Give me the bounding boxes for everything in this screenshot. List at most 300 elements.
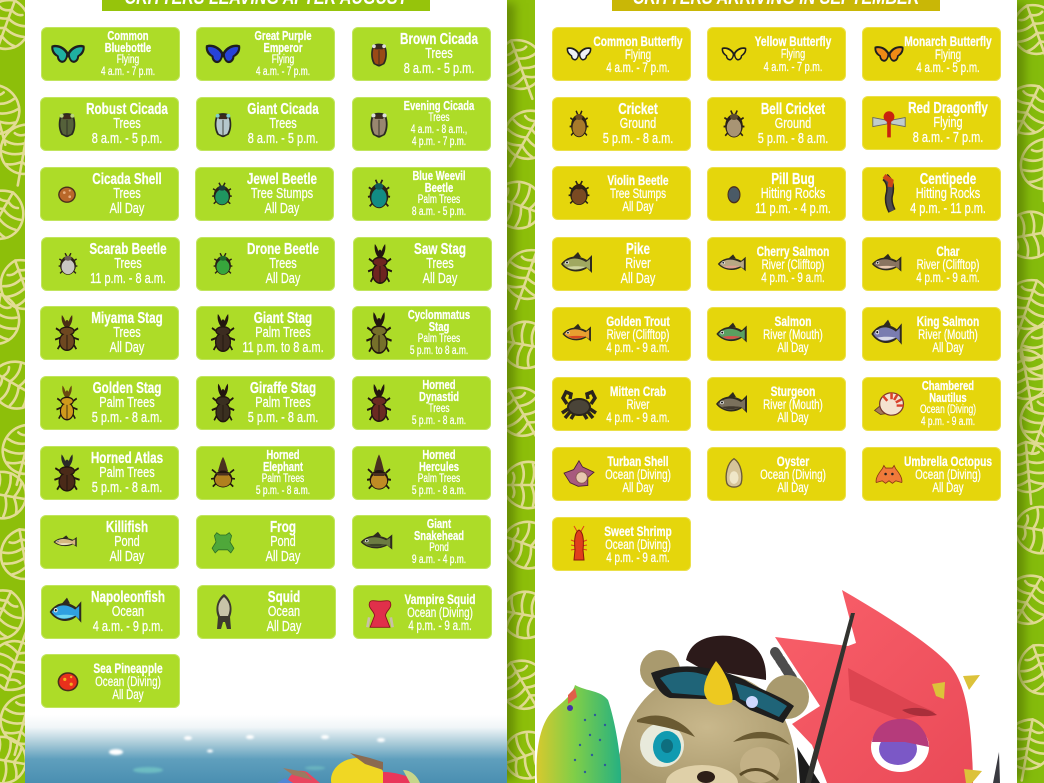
icon: Bell Cricket [718, 106, 750, 142]
text: Mitten Crab: 4 p.m. - 9 a.m. [606, 410, 669, 424]
text: King Salmon: All Day [932, 340, 963, 354]
text: Common Bluebottle: Flying [117, 54, 139, 66]
text: Golden Stag: 5 p.m. - 8 a.m. [92, 409, 162, 426]
icon: Robust Cicada [58, 113, 76, 138]
text: Common Bluebottle: Bluebottle [105, 40, 151, 55]
card: Drone Beetle [196, 237, 334, 291]
text: Monarch Butterfly: Monarch Butterfly [904, 32, 991, 48]
text: Bell Cricket [738, 103, 847, 146]
text: Horned Atlas [91, 450, 163, 496]
icon: Sturgeon [714, 384, 754, 424]
card: Cherry Salmon [707, 237, 846, 291]
text: Mitten Crab: River [626, 396, 649, 412]
text: Chambered Nautilus: 4 p.m. - 9 a.m. [920, 416, 975, 428]
text: Sea Pineapple: Sea Pineapple [93, 660, 163, 676]
text: Horned Hercules: Horned [422, 447, 456, 462]
text: Horned Dynastid [412, 377, 466, 427]
text: Common Butterfly: Flying [624, 46, 651, 62]
text: Pike: Pike [625, 241, 650, 258]
card: Golden Trout [552, 307, 690, 361]
text: Cherry Salmon [738, 244, 847, 284]
text: Golden Stag [92, 380, 162, 426]
card: Chambered Nautilus [862, 377, 1000, 431]
text: Squid [229, 591, 339, 634]
text: Yellow Butterfly: Flying [780, 46, 805, 60]
text: Jewel Beetle: Tree Stumps [251, 185, 313, 202]
icon: Brown Cicada [371, 44, 387, 66]
text: Killifish [72, 521, 182, 564]
card: Horned Atlas [40, 446, 178, 500]
text: Brown Cicada: Brown Cicada [400, 31, 478, 48]
icon: Sweet Shrimp [559, 524, 599, 564]
icon: Cicada Shell [58, 186, 76, 203]
text: Evening Cicada: Trees [428, 112, 450, 124]
card: Mitten Crab [552, 377, 690, 431]
card: Monarch Butterfly [862, 27, 1000, 81]
red alligator villager [775, 590, 1000, 783]
card: Napoleonfish [41, 585, 180, 639]
text: Giant Stag [242, 310, 324, 356]
card: Common Butterfly [552, 27, 690, 81]
card: Cicada Shell [40, 167, 178, 221]
text: Horned Elephant: Palm Trees [262, 473, 304, 485]
text: Frog: Pond [270, 533, 296, 550]
panel: critters leaving [25, 0, 507, 783]
text: Sturgeon: All Day [777, 410, 808, 424]
icon: Frog [207, 526, 239, 558]
text: Giant Snakehead: Pond [429, 542, 449, 554]
text: Giraffe Stag: Palm Trees [255, 394, 311, 411]
text: Robust Cicada [86, 101, 168, 147]
text: Golden Trout: River (Clifftop) [606, 326, 669, 342]
card: Char [862, 237, 1000, 291]
icon: Violin Beetle [563, 177, 595, 209]
icon: Red Dragonfly [871, 105, 907, 141]
text: Great Purple Emperor: Emperor [263, 40, 303, 55]
icon: Golden Trout [561, 317, 597, 351]
text: Horned Elephant [228, 449, 338, 497]
card: Giant Stag [196, 306, 334, 360]
card: Cricket [552, 97, 690, 151]
text: Giant Snakehead [384, 518, 494, 566]
text: Horned Dynastid: Dynastid [419, 389, 459, 404]
card: Giant Snakehead [352, 515, 490, 569]
text: Oyster: Ocean (Diving) [760, 466, 825, 482]
text: Evening Cicada [404, 98, 474, 148]
card grid: arriving [535, 0, 1017, 575]
text: Oyster: All Day [777, 480, 808, 494]
text: Cyclommatus Stag: Cyclommatus [408, 307, 470, 322]
card: Golden Stag [40, 376, 178, 430]
card: Horned Hercules [352, 446, 490, 500]
text: Scarab Beetle: 11 p.m. - 8 a.m. [90, 270, 166, 287]
text: Drone Beetle: All Day [266, 270, 300, 287]
text: Giraffe Stag: Giraffe Stag [250, 380, 316, 397]
text: Napoleonfish: 4 a.m. - 9 p.m. [93, 618, 163, 635]
text: Pill Bug: 11 p.m. - 4 p.m. [755, 200, 830, 217]
text: Red Dragonfly: Flying [933, 114, 962, 131]
text: Giant Cicada: 8 a.m. - 5 p.m. [248, 130, 318, 147]
icon: Mitten Crab [559, 384, 599, 424]
text: Great Purple Emperor: 4 a.m. - 7 p.m. [256, 66, 310, 78]
icon: Giraffe Stag [212, 384, 234, 422]
icon: Vampire Squid [362, 594, 398, 630]
fishing rod [805, 613, 855, 783]
text: Giant Snakehead: 9 a.m. - 4 p.m. [412, 554, 466, 566]
text: Giant Stag: Palm Trees [255, 324, 311, 341]
text: Miyama Stag: All Day [110, 339, 144, 356]
text: Turban Shell: Ocean (Diving) [605, 466, 670, 482]
text: Horned Hercules: Palm Trees [418, 473, 460, 485]
text: Sturgeon: Sturgeon [770, 382, 815, 398]
text: Drone Beetle: Drone Beetle [247, 241, 319, 258]
text: Horned Elephant: Horned [266, 447, 300, 462]
text: Violin Beetle [583, 174, 692, 212]
icon: Pill Bug [724, 180, 744, 208]
text: Killifish: All Day [110, 548, 144, 565]
icon: Char [870, 247, 908, 281]
text: Giant Stag: 11 p.m. to 8 a.m. [242, 339, 324, 356]
text: Oyster [738, 454, 847, 494]
card: Giant Cicada [196, 97, 334, 151]
card: Horned Dynastid [352, 376, 490, 430]
text: Blue Weevil Beetle: Blue Weevil [412, 168, 466, 183]
text: Horned Atlas: 5 p.m. - 8 a.m. [92, 479, 162, 496]
icon: Yellow Butterfly [720, 40, 748, 68]
text: Giant Snakehead: Giant [427, 516, 451, 531]
text: Sturgeon: River (Mouth) [763, 396, 822, 412]
card: Frog [196, 515, 334, 569]
text: Miyama Stag: Trees [113, 324, 141, 341]
panel: critters arriving [535, 0, 1017, 783]
text: Vampire Squid: Ocean (Diving) [407, 604, 473, 620]
text: Chambered Nautilus: Ocean (Diving) [919, 404, 975, 416]
text: Sturgeon [738, 384, 847, 424]
text: Jewel Beetle: All Day [265, 200, 299, 217]
text: Sweet Shrimp [583, 524, 692, 564]
rod reel [775, 652, 792, 678]
text: Golden Trout: 4 p.m. - 9 a.m. [606, 340, 669, 354]
text: Brown Cicada: 8 a.m. - 5 p.m. [404, 60, 474, 77]
text: Robust Cicada: 8 a.m. - 5 p.m. [92, 130, 162, 147]
text: Drone Beetle [247, 241, 319, 287]
text: Robust Cicada: Robust Cicada [86, 101, 168, 118]
card: Killifish [40, 515, 178, 569]
icon: Blue Weevil Beetle [368, 179, 390, 208]
icon: Common Butterfly [565, 40, 593, 68]
text: Cricket: Cricket [618, 101, 657, 118]
card: Great Purple Emperor [196, 27, 334, 81]
icon: Cricket [565, 106, 593, 142]
card: Salmon [707, 307, 846, 361]
text: Saw Stag: Saw Stag [414, 241, 466, 258]
card: Turban Shell [552, 447, 690, 501]
card: Sea Pineapple [41, 654, 180, 708]
text: Cyclommatus Stag: 5 p.m. to 8 a.m. [410, 345, 468, 357]
icon: Salmon [714, 315, 754, 353]
icon: Centipede [869, 174, 909, 214]
text: Jewel Beetle [246, 171, 317, 217]
text: Sea Pineapple: Ocean (Diving) [95, 674, 161, 688]
text: Horned Hercules: Hercules [419, 459, 459, 474]
icon: Giant Stag [210, 314, 236, 352]
sea illustration [25, 722, 507, 783]
icon: Horned Hercules [362, 453, 396, 493]
text: Centipede: 4 p.m. - 11 p.m. [910, 200, 985, 217]
card grid: leaving [40, 27, 492, 708]
text: Mitten Crab [583, 384, 692, 424]
text: Sea Pineapple [73, 662, 183, 700]
text: Cherry Salmon: River (Clifftop) [761, 256, 824, 272]
icon: Common Bluebottle [51, 44, 85, 63]
text: Turban Shell: All Day [622, 480, 653, 494]
icon: Horned Atlas [54, 454, 80, 492]
text: Horned Dynastid: 5 p.m. - 8 a.m. [412, 415, 466, 427]
text: Drone Beetle: Trees [269, 255, 297, 272]
text: Umbrella Octopus [893, 454, 1002, 494]
text: Golden Trout: Golden Trout [606, 312, 669, 328]
text: Evening Cicada: Evening Cicada [404, 98, 474, 113]
text: Cicada Shell: Cicada Shell [92, 171, 162, 188]
text: Saw Stag: Trees [426, 255, 454, 272]
text: Pike: All Day [620, 270, 655, 287]
icon: Great Purple Emperor [206, 44, 240, 64]
text: Red Dragonfly: 8 a.m. - 7 p.m. [912, 129, 983, 146]
text: King Salmon [893, 314, 1002, 354]
text: Monarch Butterfly: Flying [934, 46, 961, 62]
text: Jewel Beetle: Jewel Beetle [247, 171, 317, 188]
text: Turban Shell [583, 454, 692, 494]
text: Common Bluebottle: 4 a.m. - 7 p.m. [101, 66, 155, 78]
card: Cyclommatus Stag [352, 306, 490, 360]
card: Jewel Beetle [195, 167, 334, 221]
text: Miyama Stag: Miyama Stag [91, 310, 163, 327]
text: Brown Cicada [400, 31, 478, 77]
text: Char: River (Clifftop) [916, 256, 979, 272]
text: Brown Cicada: Trees [425, 45, 453, 62]
text: Oyster: Oyster [776, 452, 809, 468]
text: Sweet Shrimp: 4 p.m. - 9 a.m. [606, 550, 669, 564]
dark object at lower right [993, 752, 1000, 783]
text: Chambered Nautilus: Chambered [921, 378, 974, 393]
dark handle behind rod [797, 747, 820, 783]
text: Salmon [738, 314, 847, 354]
text: Robust Cicada: Trees [113, 115, 141, 132]
card: Umbrella Octopus [862, 447, 1000, 501]
icon: Sea Pineapple [52, 665, 84, 697]
text: Blue Weevil Beetle: Beetle [425, 180, 453, 195]
text: Yellow Butterfly [738, 34, 847, 74]
text: Common Butterfly: 4 a.m. - 7 p.m. [606, 60, 669, 74]
icon: Scarab Beetle [58, 252, 78, 275]
card: Pike [552, 237, 690, 291]
text: Chambered Nautilus [893, 380, 1002, 428]
text: Char [893, 244, 1002, 284]
text: Common Bluebottle [100, 28, 155, 78]
card: Brown Cicada [352, 27, 490, 81]
card: Giraffe Stag [196, 376, 334, 430]
text: Monarch Butterfly: 4 a.m. - 5 p.m. [916, 60, 979, 74]
card: Saw Stag [353, 237, 492, 291]
icon: Cyclommatus Stag [366, 312, 392, 354]
icon: Napoleonfish [48, 588, 88, 636]
text: Squid: Ocean [268, 603, 300, 620]
text: Frog: Frog [270, 519, 296, 536]
card: Robust Cicada [40, 97, 178, 151]
text: Saw Stag [414, 241, 466, 287]
text: Frog: All Day [266, 548, 300, 565]
text: Great Purple Emperor [254, 28, 312, 78]
text: Centipede: Hitting Rocks [915, 185, 980, 202]
icon: King Salmon [869, 310, 909, 358]
icon: Monarch Butterfly [873, 38, 905, 70]
text: Horned Dynastid: Trees [428, 403, 450, 415]
card: Blue Weevil Beetle [352, 167, 490, 221]
text: Turban Shell: Turban Shell [607, 452, 668, 468]
text: Blue Weevil Beetle: 8 a.m. - 5 p.m. [412, 206, 466, 218]
icon: Turban Shell [561, 456, 597, 492]
card: Violin Beetle [552, 166, 690, 220]
icon: Evening Cicada [370, 112, 388, 138]
text: Golden Stag: Palm Trees [99, 394, 155, 411]
text: Common Butterfly: Common Butterfly [593, 32, 682, 48]
text: Horned Dynastid: Horned [422, 377, 456, 392]
text: Red Dragonfly [893, 102, 1002, 145]
illustration: villagers holding fish and fishing rod [535, 570, 1017, 783]
card: Evening Cicada [352, 97, 490, 151]
text: Giraffe Stag [248, 380, 318, 426]
icon: Giant Cicada [214, 113, 232, 138]
text: Horned Elephant: 5 p.m. - 8 a.m. [256, 485, 310, 497]
card: Bell Cricket [707, 97, 846, 151]
text: Mitten Crab: Mitten Crab [609, 382, 666, 398]
text: Squid: Squid [268, 589, 300, 606]
text: Cricket [583, 103, 692, 146]
text: Violin Beetle: Violin Beetle [607, 172, 668, 188]
text: Napoleonfish: Ocean [112, 603, 144, 620]
text: Cherry Salmon: 4 p.m. - 9 a.m. [761, 270, 824, 284]
card: Sweet Shrimp [552, 517, 690, 571]
card: Yellow Butterfly [707, 27, 846, 81]
text: Cyclommatus Stag [408, 307, 470, 357]
card: Miyama Stag [40, 306, 178, 360]
text: Cricket: Ground [619, 115, 656, 132]
text: Vampire Squid [385, 592, 495, 632]
text: Sweet Shrimp: Sweet Shrimp [604, 522, 671, 538]
text: Golden Stag: Golden Stag [93, 380, 161, 397]
text: Salmon: Salmon [774, 312, 811, 328]
text: Umbrella Octopus: Umbrella Octopus [903, 452, 992, 468]
text: Giant Cicada: Giant Cicada [247, 101, 319, 118]
text: Napoleonfish: Napoleonfish [91, 589, 165, 606]
text: Violin Beetle: Tree Stumps [609, 186, 666, 200]
icon: Miyama Stag [54, 315, 80, 351]
text: Centipede [893, 173, 1002, 216]
text: Scarab Beetle: Trees [114, 255, 142, 272]
card: King Salmon [862, 307, 1000, 361]
text: Pill Bug: Hitting Rocks [760, 185, 825, 202]
text: Umbrella Octopus: All Day [932, 480, 963, 494]
icon: Golden Stag [56, 386, 78, 420]
icon: Squid [204, 592, 244, 632]
icon: Horned Dynastid [366, 384, 392, 422]
text: Napoleonfish [73, 591, 183, 634]
card: Squid [197, 585, 336, 639]
text: Scarab Beetle [89, 241, 167, 287]
text: Giant Stag: Giant Stag [254, 310, 312, 327]
text: Vampire Squid: Vampire Squid [405, 590, 475, 606]
text: Golden Trout [583, 314, 692, 354]
text: Bell Cricket: 5 p.m. - 8 a.m. [757, 130, 828, 147]
text: Killifish: Killifish [106, 519, 148, 536]
text: Giant Cicada: Trees [269, 115, 297, 132]
text: Bell Cricket: Bell Cricket [760, 101, 825, 118]
text: Miyama Stag [91, 310, 163, 356]
card: Oyster [707, 447, 846, 501]
text: Great Purple Emperor: Great Purple [255, 28, 311, 43]
text: Salmon: All Day [777, 340, 808, 354]
text: Horned Atlas: Horned Atlas [91, 450, 163, 467]
rainbow trout held up [537, 685, 621, 783]
text: Salmon: River (Mouth) [763, 326, 822, 342]
characters at the sea edge [277, 753, 420, 783]
text: Chambered Nautilus: Nautilus [929, 390, 966, 405]
text: Frog [228, 521, 338, 564]
text: King Salmon: River (Mouth) [918, 326, 977, 342]
text: Saw Stag: All Day [423, 270, 457, 287]
text: Killifish: Pond [114, 533, 140, 550]
text: Sweet Shrimp: Ocean (Diving) [605, 536, 670, 552]
text: Giant Snakehead: Snakehead [414, 528, 464, 543]
text: Horned Elephant: Elephant [263, 459, 303, 474]
text: Pill Bug: Pill Bug [771, 171, 814, 188]
text: Cyclommatus Stag: Stag [429, 319, 449, 334]
card: Pill Bug [707, 167, 846, 221]
card: Red Dragonfly [862, 96, 1000, 150]
text: Sea Pineapple: All Day [112, 686, 144, 702]
card: Horned Elephant [196, 446, 334, 500]
bear villager [617, 636, 809, 783]
text: Yellow Butterfly: 4 a.m. - 7 p.m. [763, 60, 822, 74]
text: Cricket: 5 p.m. - 8 a.m. [602, 130, 673, 147]
text: Great Purple Emperor: Flying [272, 54, 294, 66]
text: Pill Bug [738, 173, 847, 216]
text: Blue Weevil Beetle [412, 168, 466, 218]
text: Squid: All Day [267, 618, 301, 635]
text: Horned Hercules: 5 p.m. - 8 a.m. [412, 485, 466, 497]
icon: Umbrella Octopus [872, 457, 906, 491]
text: Bell Cricket: Ground [774, 115, 811, 132]
icon: Saw Stag [368, 244, 392, 284]
text: Horned Hercules [384, 449, 494, 497]
text: Scarab Beetle: Scarab Beetle [89, 241, 167, 258]
card: Scarab Beetle [41, 237, 180, 291]
text: Yellow Butterfly: Yellow Butterfly [754, 32, 831, 48]
icon: Oyster [716, 456, 752, 492]
text: Blue Weevil Beetle: Palm Trees [418, 194, 460, 206]
text: Centipede: Centipede [919, 171, 976, 188]
text: Giraffe Stag: 5 p.m. - 8 a.m. [248, 409, 318, 426]
text: Pike: River [625, 255, 650, 272]
icon: Horned Elephant [206, 456, 240, 490]
icon: Chambered Nautilus [872, 388, 906, 420]
text: Evening Cicada: 4 a.m. - 8 a.m., [411, 124, 467, 136]
card: Sturgeon [707, 377, 846, 431]
icon: Pike [559, 244, 599, 284]
text: Violin Beetle: All Day [622, 198, 653, 214]
text: Common Butterfly [583, 34, 692, 74]
text: Horned Atlas: Palm Trees [99, 464, 155, 481]
